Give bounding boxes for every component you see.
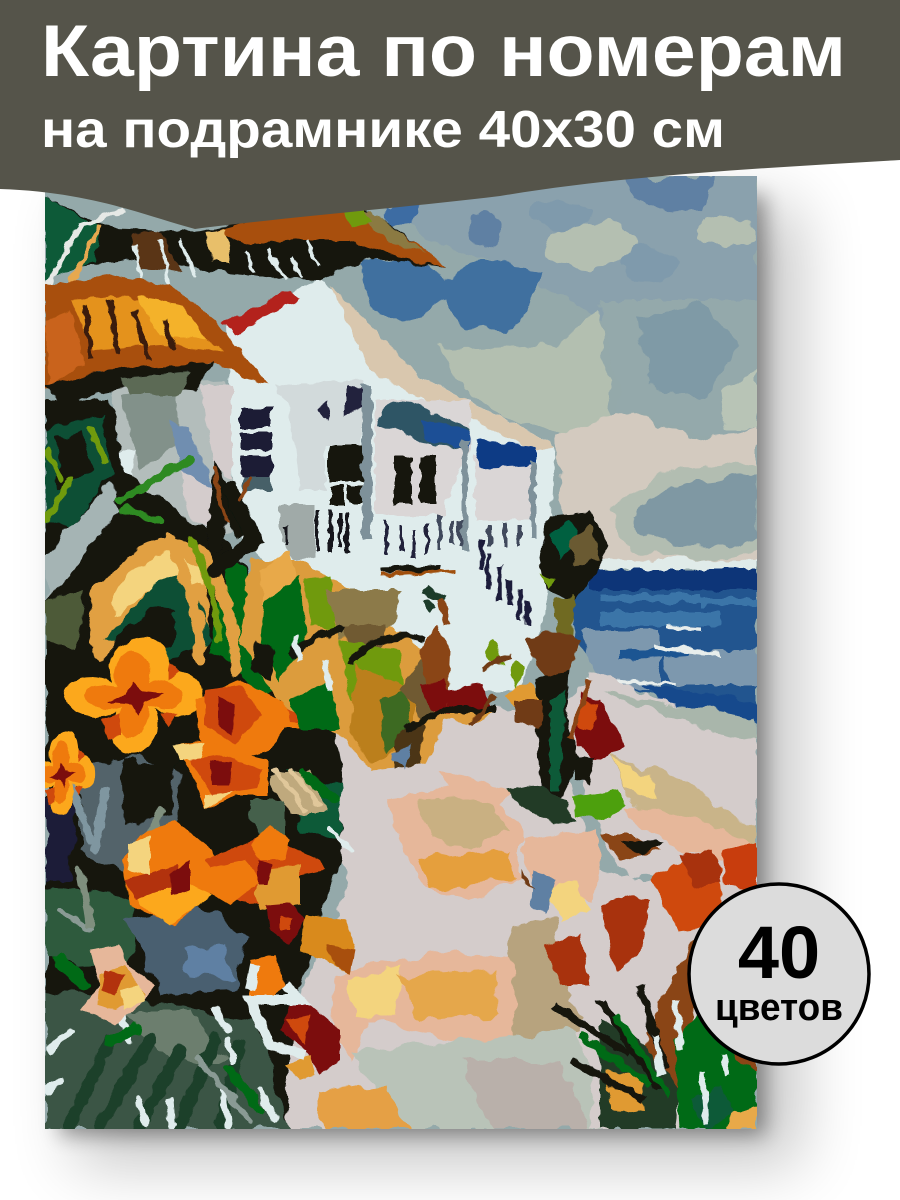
beach and garden path bbox=[250, 670, 757, 1129]
right garden plant and palm bbox=[470, 512, 665, 915]
canvas drop shadow bbox=[60, 195, 800, 1165]
garden leaves bbox=[45, 430, 352, 1125]
badge: 40 colours bbox=[689, 884, 869, 1064]
subtitle: на подрамнике 40х30 см bbox=[41, 101, 725, 159]
title: Картина по номерам bbox=[41, 11, 846, 92]
dark green foliage on the left bbox=[45, 400, 345, 1129]
sea with waves bbox=[570, 569, 757, 725]
painting: beach house bbox=[27, 176, 757, 1129]
sky and clouds bbox=[340, 176, 757, 572]
white beach house bbox=[222, 278, 555, 690]
centre garden plants bbox=[240, 550, 495, 770]
thatched palm roof, top bbox=[45, 196, 446, 285]
grey wall behind foliage bbox=[110, 380, 236, 540]
thatched palm roof, left bbox=[45, 275, 268, 405]
bottom right red flowers and leaves bbox=[545, 842, 757, 1129]
badge: 40 colours: цветов bbox=[715, 987, 843, 1029]
badge: 40 colours: 40 bbox=[738, 911, 820, 994]
orange hibiscus flowers bbox=[27, 638, 355, 1080]
header ribbon bbox=[0, 0, 900, 229]
